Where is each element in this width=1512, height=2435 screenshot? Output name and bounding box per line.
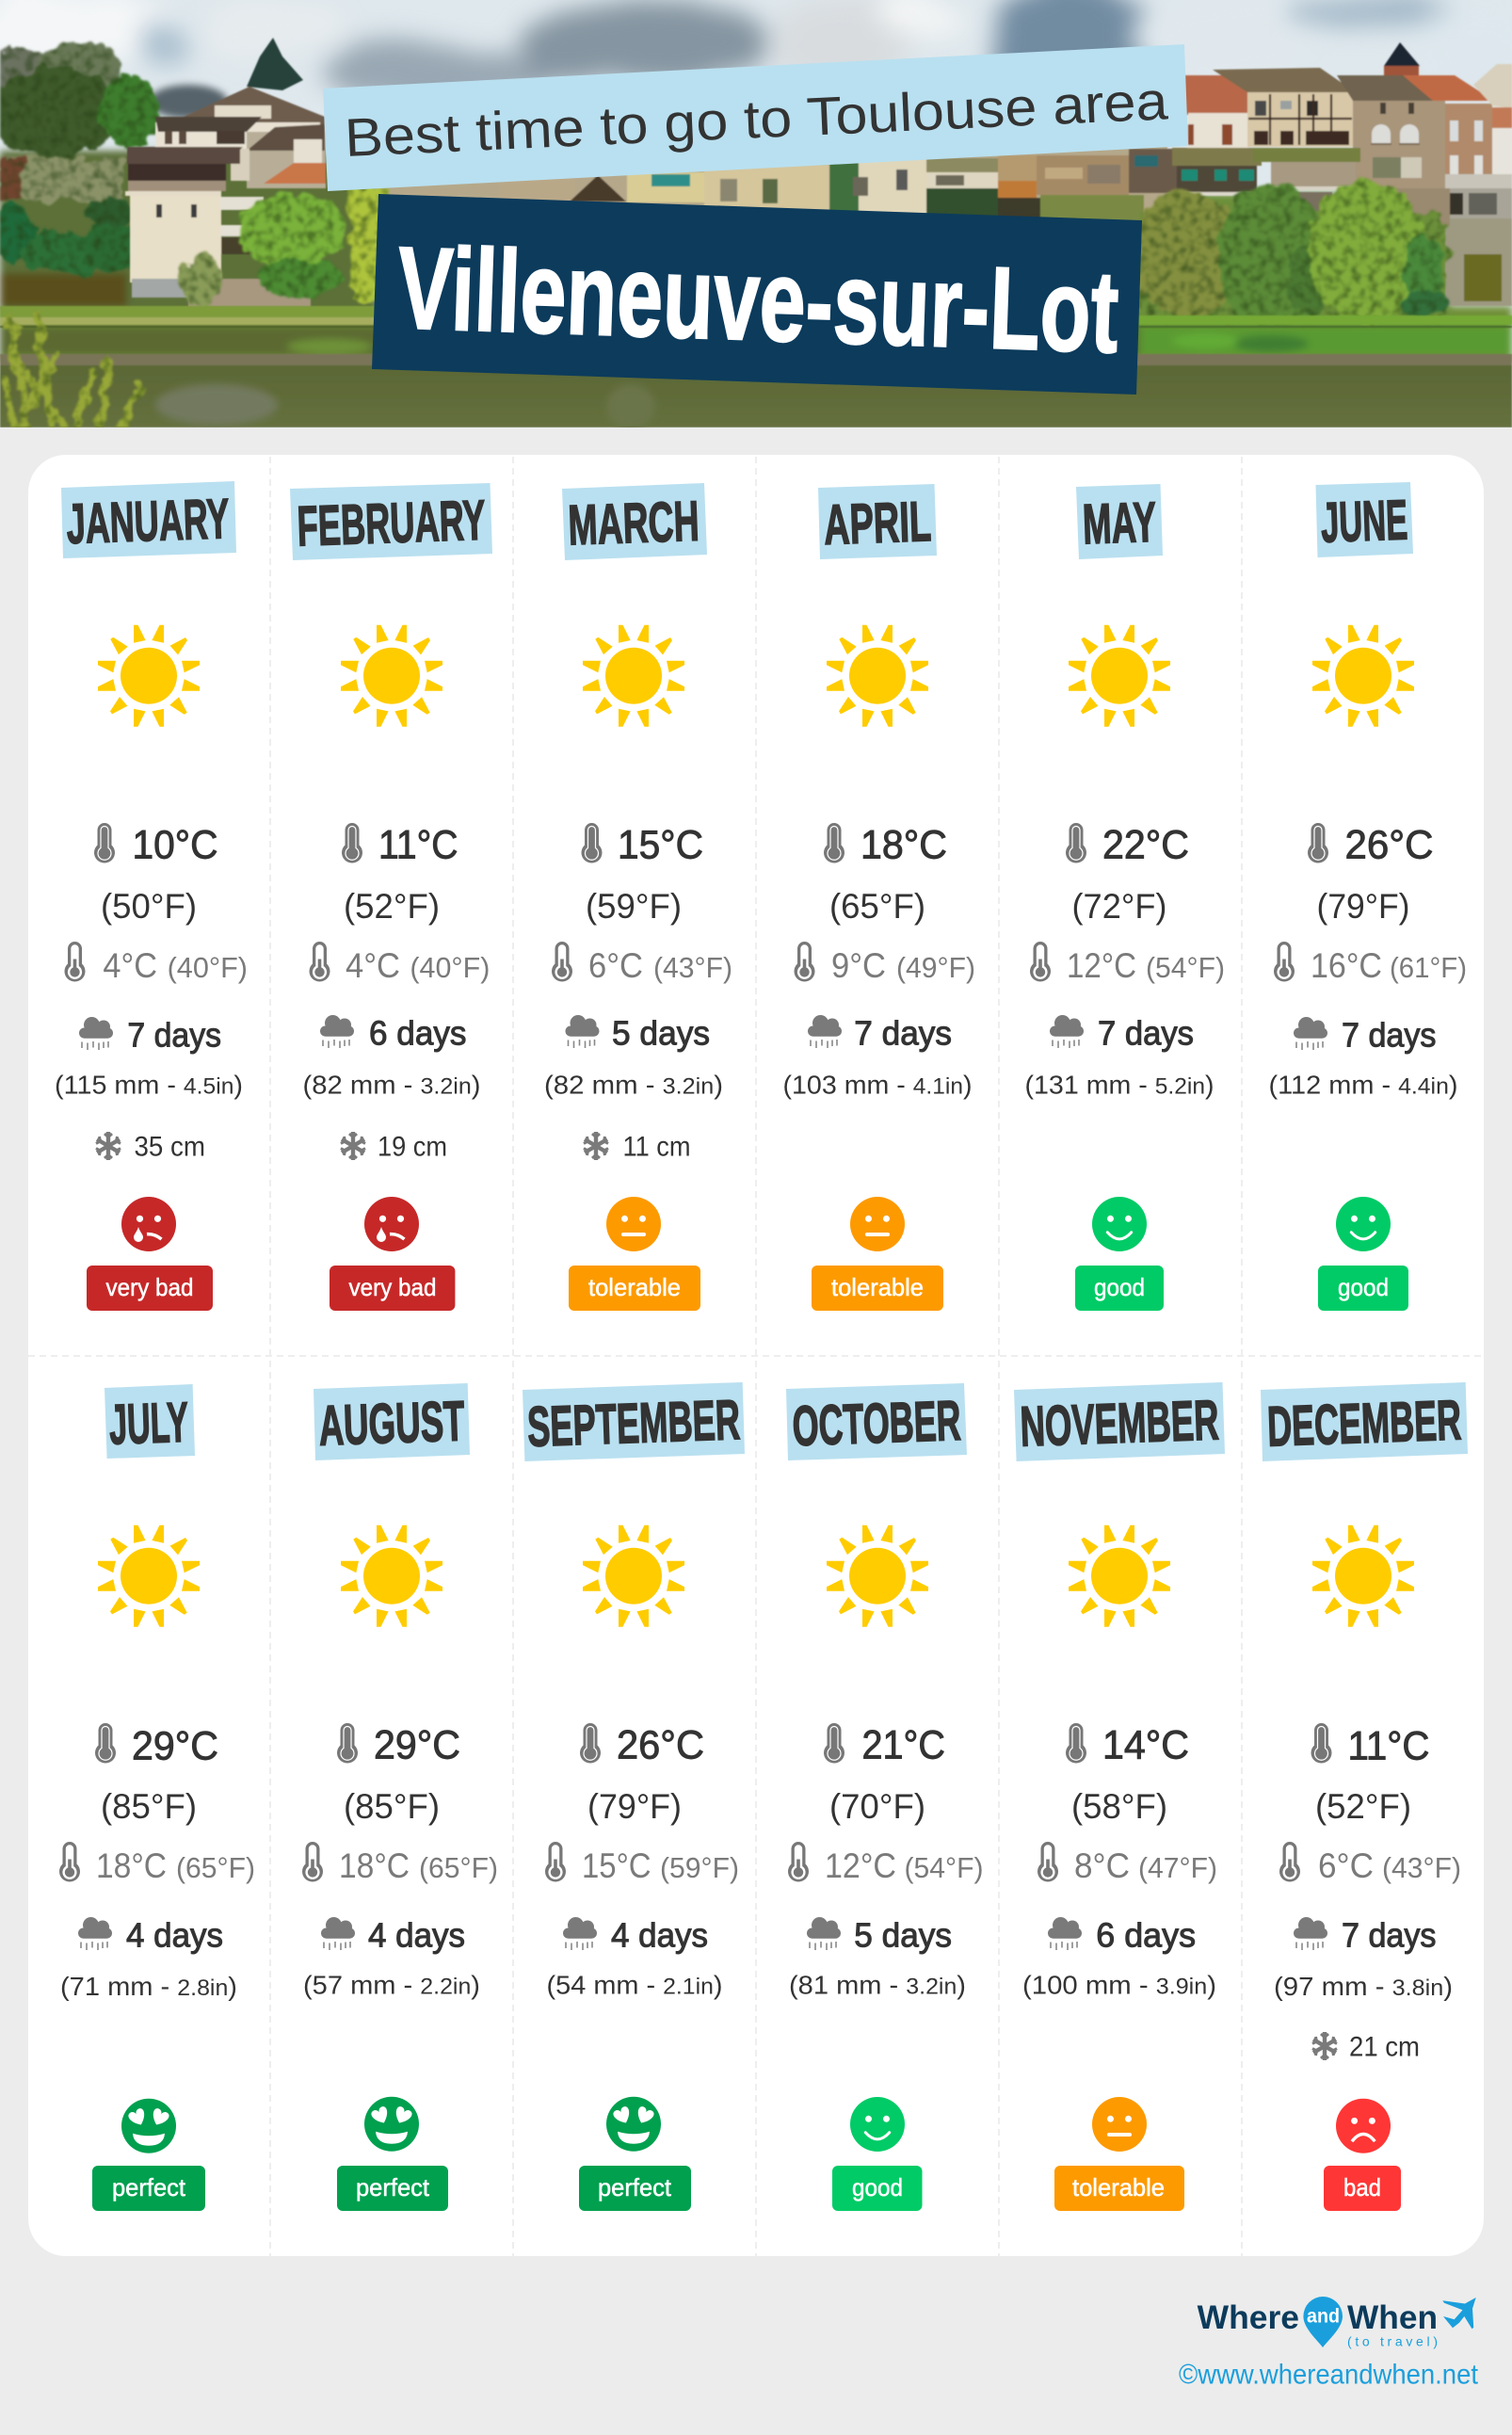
month: January [55,481,248,1311]
month: March: (82 mm - 3.2in) [544,1071,723,1100]
foreground greenery left [182,188,388,309]
month: July: 18°C [96,1846,167,1885]
month: May: (131 mm - 5.2in) [1024,1071,1214,1100]
month: February: very bad [348,1273,437,1301]
month: May: MAY [1082,491,1157,556]
month: October: (54°F) [904,1851,983,1884]
month: November: 14°C [1102,1723,1189,1768]
month: April: (103 mm - 4.1in) [783,1071,972,1100]
month: July: (71 mm - 2.8in) [60,1972,237,2001]
month: September [523,1382,745,2211]
banner: subtitle: Best time to go to Toulouse area [344,71,1169,169]
month: December: 6°C [1318,1846,1374,1885]
month: September: (59°F) [660,1851,739,1884]
logo: Where and When: and [1307,2306,1340,2328]
month: February [290,483,492,1311]
month: May [1024,484,1225,1311]
month: July: JULY [108,1391,189,1456]
logo: Where and When: (to travel) [1347,2334,1438,2349]
month: February: 11°C [378,823,458,868]
month: May: (72°F) [1071,887,1167,926]
month: June: 16°C [1311,946,1382,985]
month: October: 12°C [825,1846,896,1885]
month: February: (82 mm - 3.2in) [303,1071,481,1100]
month: March: (43°F) [653,951,732,984]
month: July: perfect [112,2173,186,2201]
month: May: 7 days [1098,1013,1194,1053]
month: August: 29°C [374,1723,460,1768]
month: August: (65°F) [419,1851,498,1884]
month: November: (58°F) [1071,1787,1167,1826]
month: April: 9°C [831,946,886,985]
month: February: 19 cm [378,1132,447,1163]
month: July [59,1384,255,2211]
banner: city title: Villeneuve-sur-Lot [395,223,1120,378]
month: March: (59°F) [586,887,682,926]
month: February: (40°F) [410,951,490,984]
month: September: (79°F) [587,1787,682,1826]
month: November: (100 mm - 3.9in) [1022,1970,1216,1999]
month: April: (65°F) [829,887,925,926]
month: May: 22°C [1102,823,1189,868]
month: June: (112 mm - 4.4in) [1268,1071,1458,1100]
copyright url: ©www.whereandwhen.net [1179,2360,1479,2391]
month: June: good [1338,1273,1389,1301]
month: January: 4°C [103,946,157,985]
month: August: (85°F) [344,1787,440,1826]
month: February: FEBRUARY [297,489,487,557]
month: April [783,484,975,1311]
month: August [302,1383,498,2211]
month: February: 6 days [369,1013,467,1053]
month: June [1269,482,1467,1311]
month: April: 18°C [861,823,947,868]
month: April: 7 days [854,1013,952,1053]
month: January: JANUARY [65,487,231,556]
month: December: (52°F) [1315,1787,1411,1826]
month: March: tolerable [588,1273,681,1301]
month: March: 15°C [618,823,703,868]
month: April: (49°F) [896,951,975,984]
month: October: (81 mm - 3.2in) [789,1970,966,1999]
month: October: 21°C [862,1723,945,1768]
month: November [1014,1382,1225,2211]
logo: Where and When: Where [1198,2299,1299,2336]
month: September: 15°C [582,1846,651,1885]
month: December: (97 mm - 3.8in) [1274,1972,1453,2001]
left trees [0,40,162,275]
month: March: 5 days [612,1013,710,1053]
month: December: 21 cm [1349,2032,1420,2063]
month: June: (61°F) [1390,951,1467,984]
month: July: 4 days [126,1915,223,1955]
month: September: SEPTEMBER [526,1388,741,1459]
month: February: 4°C [346,946,400,985]
month: March: 11 cm [623,1132,691,1163]
panel: monthly climate card [28,455,1484,2256]
logo: Where and When [1198,2297,1476,2349]
month: November: 6 days [1096,1915,1196,1955]
month: June: 7 days [1342,1015,1437,1055]
month: May: 12°C [1067,946,1136,985]
month: November: tolerable [1072,2173,1165,2201]
month: January: 35 cm [134,1132,205,1163]
month: July: 29°C [132,1723,218,1768]
month: August: perfect [356,2173,430,2201]
month: August: (57 mm - 2.2in) [303,1970,480,1999]
month: March: MARCH [567,490,700,556]
month: September: 26°C [617,1723,704,1768]
month: April: tolerable [831,1273,924,1301]
month: October: (70°F) [829,1787,925,1826]
month: July: (85°F) [101,1787,197,1826]
month: November: (47°F) [1138,1851,1217,1884]
month: December: bad [1343,2173,1381,2201]
month: March [544,483,732,1311]
month: November: NOVEMBER [1019,1388,1220,1459]
month: June: 26°C [1344,823,1433,868]
month: October: OCTOBER [791,1389,962,1458]
month: September: perfect [598,2173,672,2201]
month: October [786,1383,983,2211]
month: October: 5 days [854,1915,952,1955]
month: April: APRIL [823,490,932,556]
month: July: (65°F) [176,1851,255,1884]
month: September: 4 days [611,1915,708,1955]
month: November: 8°C [1074,1846,1130,1885]
month: January: 7 days [127,1016,221,1055]
month: January: (40°F) [168,951,248,984]
month: December: 7 days [1342,1915,1437,1955]
month: January: (115 mm - 4.5in) [55,1071,243,1100]
month: May: good [1094,1273,1145,1301]
month: June: JUNE [1320,488,1408,555]
month: June: (79°F) [1316,887,1410,926]
month: December: 11°C [1348,1723,1429,1768]
month: February: (52°F) [344,887,440,926]
month: September: (54 mm - 2.1in) [547,1970,723,1999]
month: August: 4 days [368,1915,465,1955]
banner: subtitle [323,44,1188,191]
right trees [1132,179,1449,330]
logo: Where and When: When [1347,2299,1438,2336]
month: December [1261,1382,1468,2211]
month: August: 18°C [339,1846,410,1885]
month: March: 6°C [588,946,643,985]
month: August: AUGUST [317,1389,466,1458]
month: January: 10°C [132,823,218,868]
month: January: (50°F) [101,887,197,926]
month: October: good [852,2173,903,2201]
month: January: very bad [105,1273,194,1301]
banner: city title [372,194,1142,395]
header photo: riverside town [0,0,1512,429]
month: December: (43°F) [1382,1851,1461,1884]
month: May: (54°F) [1146,951,1225,984]
